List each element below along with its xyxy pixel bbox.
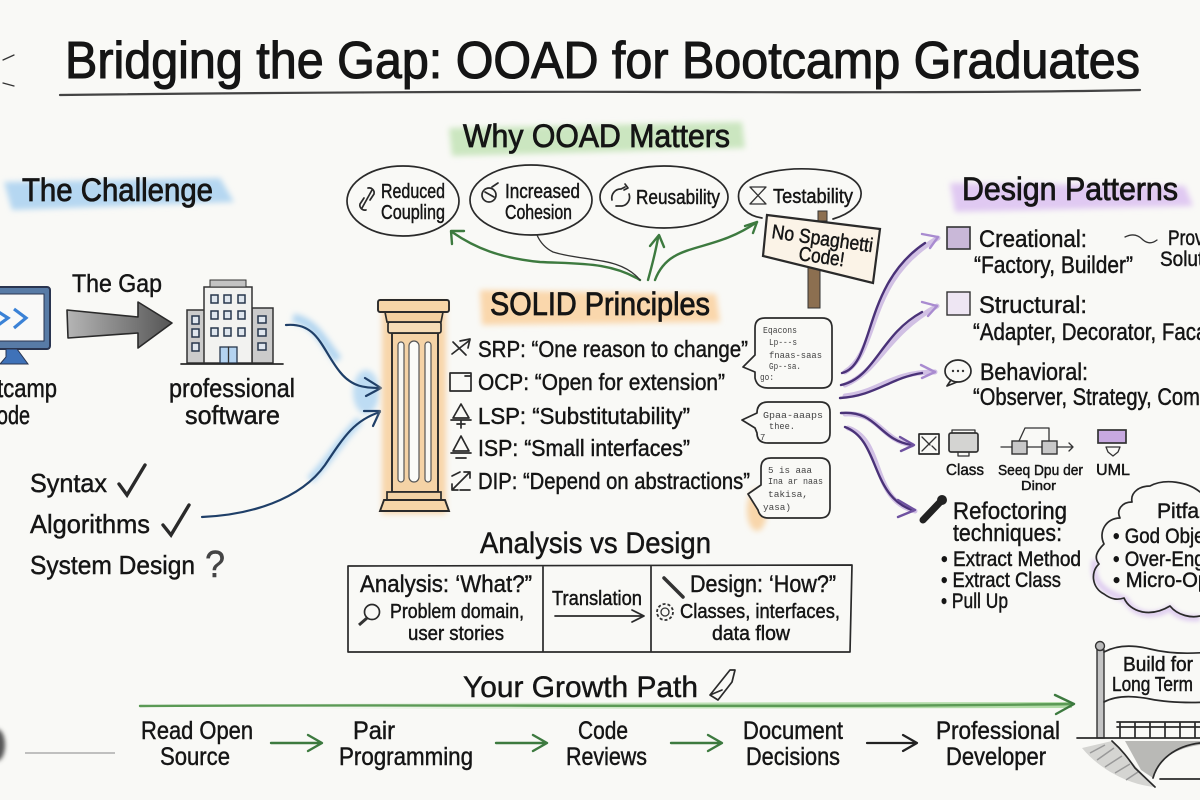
pattern: structural: Structural: (979, 292, 1087, 319)
icon: sequence diagram (998, 428, 1083, 493)
step: pair programming: Programming (339, 743, 473, 771)
cell: design: Classes, interfaces, (680, 601, 840, 623)
icon: bootcamp monitor (0, 287, 50, 364)
step: read open source: Source (160, 743, 230, 771)
icon: UML (1096, 430, 1130, 479)
bubble: code 2: Gpaa-aaaps (763, 411, 823, 421)
label: bootcamp code (0, 373, 57, 430)
refactoring techniques: Refoctoring (953, 498, 1067, 525)
cloud: pitfalls (1093, 482, 1200, 618)
bubble: code 2: thee. (769, 422, 795, 432)
decorative corner mark (0, 729, 115, 761)
benefit: reusability: Reusability (636, 187, 720, 209)
bubble: code 2 (742, 402, 830, 443)
cell: analysis: user stories (408, 623, 504, 645)
step: code reviews (566, 717, 647, 771)
bubble: code 3: takisa, (768, 490, 808, 500)
step: document decisions: Document (743, 717, 843, 745)
cell: translation: Translation (552, 588, 642, 610)
cell: design: Design: ‘How?” (690, 571, 836, 598)
step: read open source: Read Open (141, 717, 253, 745)
list: OCP: OCP: “Open for extension” (478, 369, 725, 395)
step: read open source (141, 717, 253, 771)
step: code reviews: Reviews (566, 743, 647, 771)
icon: sequence diagram: Dinor (1021, 478, 1057, 493)
pattern: creational: Creational: (979, 226, 1087, 253)
bubble: code 1: Gp--sa. (769, 362, 801, 372)
list: SRP: SRP: “One reason to change” (478, 336, 748, 362)
arrows: green branches (451, 222, 757, 280)
arrow: step 3 to 4 (671, 735, 722, 751)
refactoring techniques: • Pull Up (941, 590, 1008, 613)
benefit: reduced coupling (347, 166, 459, 236)
icon: sequence diagram: Seeq Dpu der (998, 462, 1083, 479)
refactoring techniques: • Extract Method (941, 548, 1081, 571)
code speech bubbles (742, 318, 832, 531)
benefit: testability (739, 169, 861, 219)
step: document decisions: Decisions (746, 743, 840, 771)
title: Bridging the Gap: OOAD for Bootcamp Graduates (65, 32, 1140, 90)
checklist: skills: Algorithms (30, 509, 150, 539)
refactoring techniques: techniques: (953, 520, 1062, 547)
cell: analysis (359, 571, 532, 645)
icon: bridge (1077, 722, 1200, 787)
bubble: code 1 (743, 318, 832, 388)
heading: analysis vs design: Analysis vs Design (480, 527, 711, 560)
benefit: reduced coupling: Coupling (381, 202, 445, 224)
label: professional software: software (185, 400, 280, 430)
sign: no spaghetti code: No Spaghetti (770, 221, 874, 257)
step: code reviews: Code (578, 717, 628, 745)
bubble: code 3: yasa) (763, 503, 791, 513)
UML diagrams row (919, 428, 1130, 493)
panel: your growth path (140, 642, 1200, 787)
arrow: step 4 to 5 (867, 735, 917, 751)
pattern: behavioral: Behavioral: (980, 359, 1088, 386)
heading: SOLID principles: SOLID Principles (490, 286, 710, 322)
pattern: structural (947, 292, 1200, 346)
checklist: skills: System Design (30, 550, 195, 580)
panel: analysis vs design (348, 527, 852, 652)
bubble: code 3: Ina ar naas (768, 477, 823, 487)
arrow: long growth line (140, 695, 1074, 714)
heading: your growth path: Your Growth Path (463, 671, 698, 704)
benefit: testability: Testability (773, 186, 853, 208)
arrow: step 1 to 2 (271, 735, 322, 751)
cell: analysis: Analysis: ‘What?” (360, 571, 532, 598)
step: professional developer (936, 717, 1060, 771)
bubble: code 1: go: (760, 373, 774, 383)
cell: analysis: Problem domain, (390, 601, 524, 623)
checklist: skills (30, 465, 225, 586)
icon: hammer tool (923, 495, 947, 520)
step: professional developer: Professional (936, 717, 1060, 745)
label: the gap: The Gap (72, 270, 162, 298)
arrows: purple branches (840, 234, 938, 517)
label: professional software (169, 373, 295, 430)
icon: pillar (378, 300, 449, 514)
bubble: code 1: fnaas-saas (769, 351, 822, 361)
panel: design patterns (840, 171, 1200, 618)
icon: UML: UML (1096, 462, 1130, 479)
benefit: reduced coupling: Reduced (381, 181, 445, 203)
refactoring techniques (923, 495, 1081, 613)
heading: why OOAD matters: Why OOAD Matters (463, 118, 730, 154)
cell: design: data flow (712, 623, 791, 645)
icon: class diagram monitor: Class (946, 462, 984, 479)
sign: no spaghetti code: Code! (797, 243, 846, 271)
pattern: behavioral (945, 359, 1200, 411)
label: professional software: professional (169, 373, 295, 403)
arrow: step 2 to 3 (496, 735, 547, 751)
icon: office building (181, 280, 283, 364)
panel: the challenge (0, 172, 381, 586)
step: professional developer: Developer (946, 743, 1046, 771)
cell: design (657, 571, 840, 645)
refactoring techniques: • Extract Class (941, 569, 1061, 592)
pattern: creational: “Factory, Builder” (974, 252, 1133, 279)
note: proven solutions (1125, 227, 1200, 271)
step: pair programming (339, 717, 473, 771)
icon: class box (919, 434, 939, 454)
arrow: skills to pillar (202, 411, 380, 517)
arrow: building to pillar (286, 318, 381, 414)
checklist: skills: ? (205, 544, 225, 586)
bubble: code 2: 7 (760, 433, 765, 443)
icon: class diagram monitor (946, 430, 984, 479)
checklist: skills: Syntax (30, 468, 107, 498)
benefit: increased cohesion (470, 165, 592, 235)
sign: no spaghetti code (763, 211, 880, 308)
bubble: code 1: Eqacons (763, 326, 797, 336)
table frame (348, 565, 852, 652)
benefit: increased cohesion: Increased (505, 181, 580, 203)
list: LSP: LSP: “Substitutability” (478, 403, 690, 429)
step: document decisions (743, 717, 843, 771)
bubble: code 1: Lp---s (769, 338, 797, 348)
flag: build for long term: Build for (1123, 654, 1193, 676)
cell: translation (552, 588, 644, 622)
benefit: increased cohesion: Cohesion (505, 202, 572, 224)
flag: build for long term (1096, 642, 1200, 738)
list: ISP: ISP: “Small interfaces” (478, 435, 690, 461)
icon: pencil (710, 670, 735, 700)
heading: the challenge: The Challenge (22, 172, 213, 208)
heading: design patterns: Design Patterns (962, 171, 1178, 207)
arrow: the gap (67, 302, 172, 348)
bubble: code 3 (748, 458, 830, 518)
panel: SOLID principles (378, 286, 832, 531)
list: DIP: DIP: “Depend on abstractions” (478, 468, 750, 494)
panel: why OOAD matters (347, 118, 861, 280)
bubble: code 3: 5 is aaa (768, 466, 813, 476)
pattern: creational (947, 226, 1133, 279)
step: pair programming: Pair (353, 717, 395, 745)
benefit: reusability (600, 166, 728, 228)
